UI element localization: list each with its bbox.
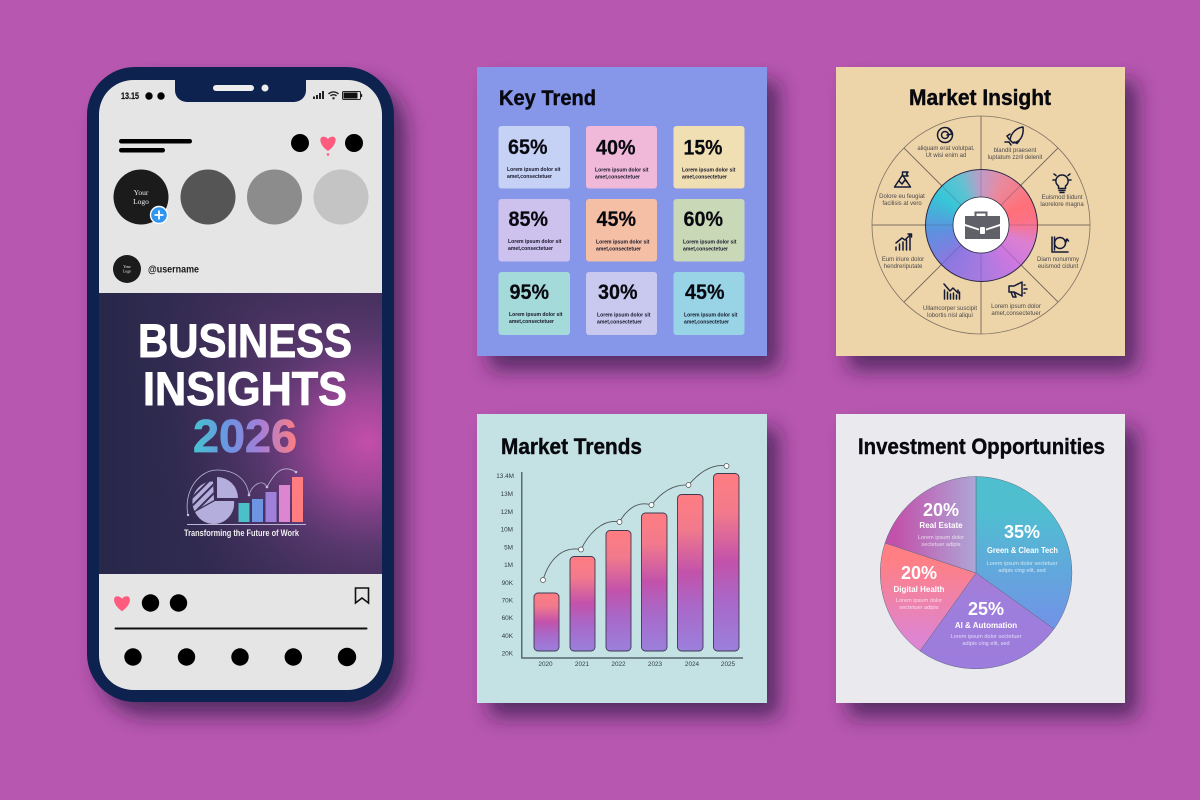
card 65%: amet,consectetuer bbox=[507, 174, 552, 180]
card 40%: amet,consectetuer bbox=[595, 174, 640, 180]
card 40%: 40% bbox=[596, 136, 636, 160]
item: right lower: euismod cidunt bbox=[1038, 264, 1079, 270]
x axis labels: 2021 bbox=[575, 661, 590, 668]
item: left upper: facilisis at vero bbox=[882, 201, 922, 207]
user row: @username bbox=[148, 264, 199, 276]
item: bottom right: amet,consectetuer bbox=[991, 311, 1041, 317]
x axis labels: 2023 bbox=[648, 661, 663, 668]
item: right upper: Euismod tiidunt bbox=[1041, 195, 1083, 201]
bars bbox=[534, 474, 739, 651]
header lines bbox=[119, 139, 192, 152]
ring spokes bbox=[924, 168, 1038, 282]
logo chart bbox=[187, 469, 306, 525]
y axis labels bbox=[496, 473, 514, 658]
y axis labels: 5M bbox=[504, 544, 513, 552]
heading: Investment Opportunities bbox=[858, 434, 1105, 459]
label: digital health: Lorem ipsum dolor bbox=[896, 598, 942, 604]
card 85%: 85% bbox=[508, 207, 548, 231]
heading: Market Insight bbox=[909, 85, 1052, 110]
label: real estate: sectetuer adipis bbox=[921, 542, 961, 548]
label: green and clean tech: Green & Clean Tech bbox=[987, 546, 1058, 555]
x axis labels: 2025 bbox=[721, 661, 736, 668]
story: your logo: Logo bbox=[133, 197, 149, 206]
label: real estate: Lorem ipsum dolor bbox=[918, 535, 964, 541]
y axis labels: 90K bbox=[502, 580, 514, 587]
heading: Market Trends bbox=[501, 434, 642, 459]
gradient ring bbox=[924, 168, 1038, 282]
card 15%: 15% bbox=[684, 136, 722, 160]
card 40%: Lorem ipsum dolor sit bbox=[595, 168, 649, 174]
x axis labels: 2022 bbox=[611, 661, 626, 668]
notch speaker bbox=[213, 84, 268, 92]
card 30%: amet,consectetuer bbox=[597, 320, 642, 326]
item: left lower bbox=[882, 234, 924, 270]
centre disc bbox=[953, 197, 1009, 253]
item: bottom left: Ullamcorper suscipit bbox=[923, 306, 977, 312]
card 60%: amet,consectetuer bbox=[683, 246, 728, 252]
item: left lower: Eum iriure dolor bbox=[882, 257, 924, 263]
label: ai and automation: adipis cing elit, sed bbox=[962, 641, 1010, 647]
card 45%: amet,consectetuer bbox=[596, 246, 641, 252]
panel: investment opportunities bbox=[836, 414, 1125, 703]
card 30%: Lorem ipsum dolor sit bbox=[597, 312, 651, 318]
post image bbox=[99, 293, 382, 574]
card 95%: amet,consectetuer bbox=[509, 319, 554, 325]
card 95%: 95% bbox=[510, 280, 549, 304]
y axis labels: 13.4M bbox=[496, 473, 514, 480]
card 95%: Lorem ipsum dolor sit bbox=[509, 312, 563, 318]
card 85%: Lorem ipsum dolor sit bbox=[508, 239, 562, 245]
card 45% second: amet,consectetuer bbox=[684, 320, 729, 326]
label: green and clean tech: Lorem ipsum dolor sectetuer bbox=[987, 561, 1058, 567]
label: digital health: sectetuer adipis bbox=[899, 605, 939, 611]
user row: Your bbox=[123, 265, 131, 269]
label: real estate: Real Estate bbox=[919, 521, 963, 530]
year: 2026 bbox=[193, 410, 297, 462]
y axis labels: 20K bbox=[502, 650, 514, 658]
wheel outline and spokes bbox=[872, 116, 1090, 334]
post title: BUSINESS bbox=[138, 314, 352, 367]
card 40% bbox=[586, 126, 657, 188]
card 95% bbox=[498, 272, 570, 335]
status bar time: 13.15 bbox=[121, 91, 139, 101]
bottom nav bbox=[124, 648, 356, 666]
axes bbox=[522, 472, 743, 658]
status bar time bbox=[121, 91, 165, 101]
item: top right: blandit praesent bbox=[994, 148, 1037, 154]
card 30%: 30% bbox=[598, 280, 638, 304]
card 15% bbox=[674, 126, 744, 188]
item: top left bbox=[917, 128, 975, 159]
divider bbox=[114, 628, 368, 630]
label: real estate: 20% bbox=[923, 500, 959, 520]
label: ai and automation: 25% bbox=[968, 599, 1004, 619]
item: top left: aliquam erat volutpat. bbox=[917, 146, 975, 152]
phone mockup bbox=[87, 67, 394, 702]
card 45%: 45% bbox=[596, 207, 636, 231]
label: ai and automation bbox=[951, 599, 1022, 647]
phone screen bbox=[99, 80, 382, 690]
label: green and clean tech: adipis cing elit, sed bbox=[998, 568, 1046, 574]
card 30% bbox=[586, 272, 657, 335]
card 15%: Lorem ipsum dolor sit bbox=[682, 168, 736, 174]
item: bottom right bbox=[991, 282, 1041, 317]
card 45% second: Lorem ipsum dolor sit bbox=[684, 312, 738, 318]
trend curve bbox=[540, 464, 729, 582]
tagline: Transforming the Future of Work bbox=[184, 528, 300, 538]
item: bottom right: Lorem ipsum dolor bbox=[991, 304, 1041, 310]
post actions bbox=[114, 588, 369, 612]
item: right upper: laorelore magna bbox=[1040, 202, 1084, 208]
y axis labels: 1M bbox=[504, 562, 513, 569]
heading: Key Trend bbox=[499, 87, 596, 110]
item: left lower: hendreriputate bbox=[884, 264, 923, 270]
card 45% bbox=[586, 199, 657, 262]
post title: INSIGHTS bbox=[143, 362, 347, 415]
story: your logo bbox=[114, 170, 168, 224]
card 60%: Lorem ipsum dolor sit bbox=[683, 240, 737, 246]
card 45% second bbox=[674, 272, 744, 335]
x axis labels: 2020 bbox=[538, 661, 553, 668]
story circles bbox=[180, 170, 368, 224]
label: green and clean tech bbox=[987, 522, 1058, 574]
item: left upper: Dolore eu feugiat bbox=[879, 194, 925, 200]
card 85%: amet,consectetuer bbox=[508, 246, 553, 252]
icon: briefcase bbox=[965, 212, 1000, 239]
card 65%: 65% bbox=[508, 135, 548, 159]
user row: Logo bbox=[123, 270, 131, 274]
user row bbox=[113, 255, 199, 283]
item: left upper bbox=[879, 172, 925, 207]
pie chart bbox=[880, 476, 1072, 669]
panel: market trends bbox=[477, 414, 767, 703]
phone body bbox=[87, 67, 394, 702]
item: top left: Ut wisi enim ad bbox=[926, 153, 966, 159]
post title bbox=[138, 314, 352, 415]
y axis labels: 12M bbox=[501, 509, 513, 516]
label: ai and automation: AI & Automation bbox=[955, 621, 1017, 630]
label: digital health: 20% bbox=[901, 563, 937, 583]
item: top right: luptatum zzril delenit bbox=[988, 155, 1043, 161]
card 45%: Lorem ipsum dolor sit bbox=[596, 240, 650, 246]
item: bottom left: lobortis nisl aliqui bbox=[927, 313, 973, 319]
card 45% second: 45% bbox=[685, 280, 724, 304]
panel: market insight bbox=[836, 67, 1125, 356]
item: right lower: Diam nonummy bbox=[1037, 257, 1079, 263]
y axis labels: 70K bbox=[502, 598, 514, 604]
card 85% bbox=[498, 199, 570, 262]
panel: key trend bbox=[477, 67, 767, 356]
card 65% bbox=[498, 126, 570, 188]
item: bottom left bbox=[923, 284, 977, 319]
y axis labels: 13M bbox=[501, 491, 513, 498]
card 15%: amet,consectetuer bbox=[682, 174, 727, 180]
item: right lower bbox=[1037, 237, 1079, 270]
status icons bbox=[313, 91, 362, 100]
story: your logo: Your bbox=[134, 188, 149, 197]
y axis labels: 40K bbox=[502, 633, 514, 640]
x axis labels: 2024 bbox=[685, 661, 700, 668]
label: digital health: Digital Health bbox=[893, 585, 945, 594]
y axis labels: 60K bbox=[502, 615, 514, 622]
card 60%: 60% bbox=[684, 207, 723, 231]
label: real estate bbox=[918, 500, 964, 548]
label: ai and automation: Lorem ipsum dolor sectetuer bbox=[951, 634, 1022, 640]
card 65%: Lorem ipsum dolor sit bbox=[507, 167, 561, 173]
x axis labels bbox=[538, 661, 736, 668]
card 60% bbox=[674, 199, 744, 262]
item: top right bbox=[988, 127, 1043, 161]
item: right upper bbox=[1040, 174, 1084, 208]
label: green and clean tech: 35% bbox=[1004, 522, 1040, 542]
header icons bbox=[291, 134, 363, 156]
y axis labels: 10M bbox=[501, 526, 513, 534]
label: digital health bbox=[893, 563, 945, 611]
